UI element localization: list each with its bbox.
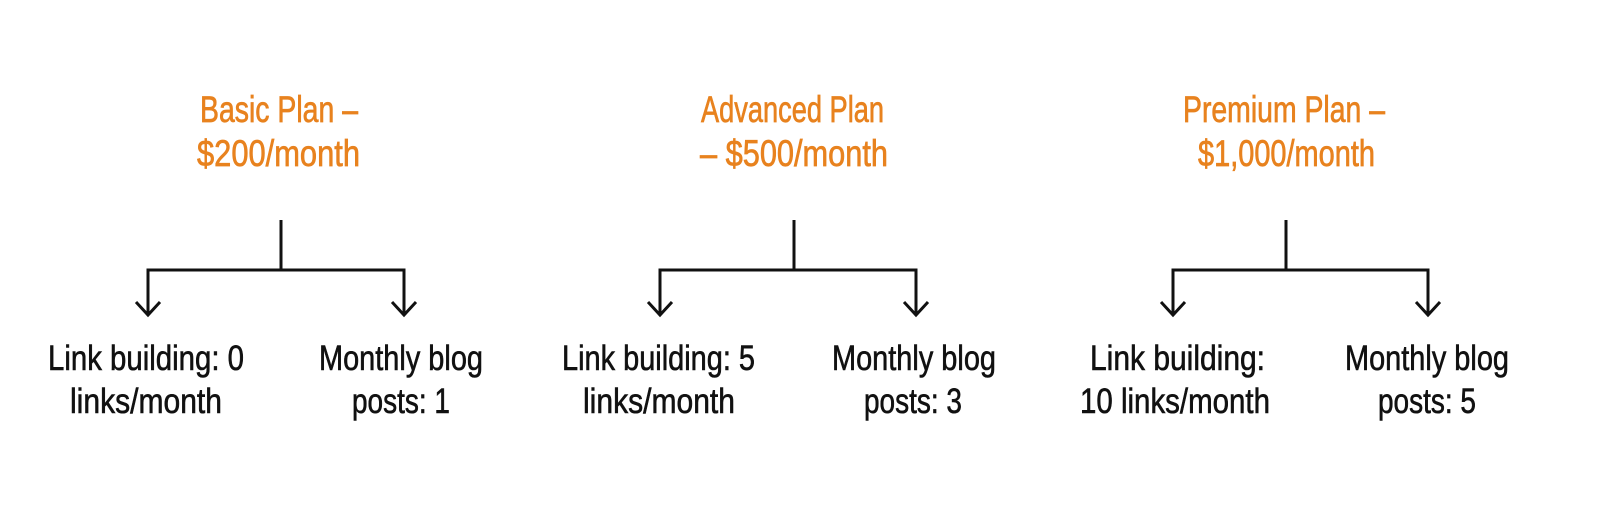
text: basic blog posts: Monthly blog xyxy=(319,339,483,378)
text: basic link building xyxy=(48,339,244,421)
panel: advanced plan xyxy=(562,89,996,421)
heading: premium plan: Premium Plan – xyxy=(1183,89,1385,130)
panel: basic plan xyxy=(48,89,483,421)
text: advanced blog posts: posts: 3 xyxy=(864,382,962,421)
text: premium blog posts: posts: 5 xyxy=(1378,382,1476,421)
heading: basic plan: $200/month xyxy=(197,133,360,174)
heading: premium plan xyxy=(1183,89,1385,174)
text: premium link building: 10 links/month xyxy=(1080,382,1270,421)
text: advanced link building: links/month xyxy=(583,382,735,421)
text: basic blog posts xyxy=(319,339,483,421)
text: advanced blog posts xyxy=(832,339,996,421)
heading: basic plan: Basic Plan – xyxy=(200,89,358,130)
text: advanced link building: Link building: 5 xyxy=(562,339,755,378)
text: basic link building: links/month xyxy=(70,382,222,421)
arrow tree: basic xyxy=(136,220,416,315)
text: premium blog posts xyxy=(1345,339,1509,421)
text: basic link building: Link building: 0 xyxy=(48,339,244,378)
heading: advanced plan xyxy=(700,89,888,174)
text: premium link building xyxy=(1080,339,1270,421)
text: advanced link building xyxy=(562,339,755,421)
heading: premium plan: $1,000/month xyxy=(1198,133,1375,174)
text: premium blog posts: Monthly blog xyxy=(1345,339,1509,378)
heading: basic plan xyxy=(197,89,360,174)
heading: advanced plan: – $500/month xyxy=(700,133,888,174)
panel: premium plan xyxy=(1080,89,1509,421)
arrow tree: premium xyxy=(1161,220,1440,315)
text: advanced blog posts: Monthly blog xyxy=(832,339,996,378)
text: basic blog posts: posts: 1 xyxy=(352,382,450,421)
text: premium link building: Link building: xyxy=(1090,339,1265,378)
arrow tree: advanced xyxy=(648,220,928,315)
heading: advanced plan: Advanced Plan xyxy=(701,89,884,130)
